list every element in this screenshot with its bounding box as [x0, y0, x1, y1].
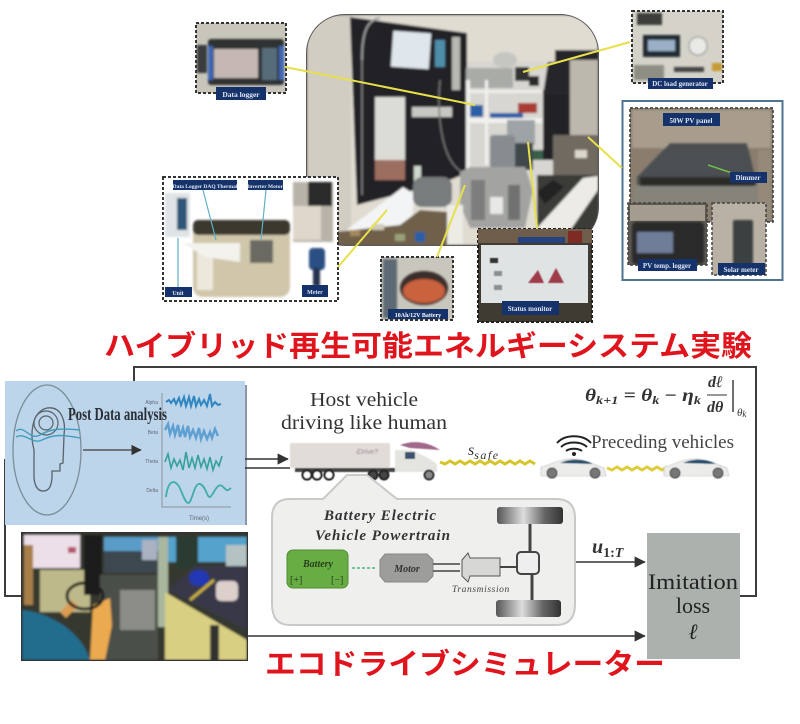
- panel: wind turbine inset: [163, 177, 338, 301]
- icon: transmission and axle: [433, 507, 563, 617]
- label: solar meter: Solar meter: [723, 266, 759, 274]
- arrow: simulator to imitation loss: [247, 635, 645, 637]
- feedback loop line: [134, 367, 756, 596]
- spring: truck to car: [440, 461, 535, 464]
- formula: parameter update: k: [742, 409, 747, 419]
- PV temperature logger photo: [628, 203, 707, 265]
- chart: signal waveforms: Time(s): [189, 516, 209, 522]
- label: post data analysis: Post Data analysis: [68, 404, 167, 424]
- panel: imitation loss: Imitation: [648, 569, 738, 594]
- icon: head with brain waves: [13, 385, 81, 515]
- label: inverter: [247, 180, 283, 190]
- PV panel photo: [630, 108, 773, 222]
- formula: parameter update: θ: [641, 385, 651, 405]
- label: dimmer: [730, 172, 767, 183]
- label: meter: Meter: [307, 290, 323, 296]
- formula: parameter update: dθ: [707, 399, 724, 416]
- panel: post data analysis: [5, 381, 247, 525]
- chart: signal waveforms: [145, 393, 231, 522]
- label: status monitor: Status monitor: [508, 305, 552, 313]
- icon: battery: [−]: [331, 575, 343, 586]
- line from simulator to analysis: [5, 459, 25, 596]
- label: safe distance: s: [468, 442, 474, 459]
- label: preceding vehicles: Preceding vehicles: [591, 432, 734, 453]
- panel: PV setup group: [622, 101, 782, 280]
- icon: battery: [287, 550, 348, 588]
- chart: signal waveforms: Delta: [146, 488, 158, 494]
- label: data logger: Data logger: [222, 90, 260, 99]
- arrow: control output: [576, 561, 645, 563]
- formula: parameter update: =: [618, 385, 641, 405]
- label: wind turbine sensor: [173, 180, 238, 190]
- label: inverter: Inverter Motor: [247, 184, 283, 190]
- label: PV temp logger: PV temp. logger: [643, 262, 691, 270]
- label: dimmer: Dimmer: [736, 174, 760, 182]
- label: control sequence: u: [592, 536, 603, 558]
- formula: parameter update: k+1: [596, 393, 618, 407]
- panel: data logger inset: [196, 23, 286, 100]
- label: powertrain title: Vehicle Powertrain: [315, 528, 451, 544]
- title: eco-drive simulator: エコドライブシミュレーター: [265, 647, 665, 681]
- arrow: head to signals: [83, 449, 141, 451]
- label: unit: [165, 287, 192, 297]
- label: host vehicle: Host vehicle: [310, 389, 418, 411]
- chart: signal waveforms: Beta: [148, 430, 158, 436]
- icon: wifi signal: [557, 436, 591, 455]
- yellow connector lines: [285, 42, 630, 267]
- formula: parameter update: −: [659, 385, 682, 405]
- icon: preceding car 1: [541, 459, 606, 478]
- label: wind turbine sensor: Data Logger DAQ Thermal: [173, 184, 238, 190]
- panel: main laboratory photo: [306, 14, 599, 246]
- label: unit: Unit: [172, 291, 184, 297]
- formula: parameter update: [585, 374, 747, 419]
- panel: imitation loss: loss: [676, 593, 710, 618]
- spring: car to car: [607, 467, 667, 470]
- formula: parameter update: θ: [737, 407, 742, 419]
- formula: parameter update: θ: [585, 385, 594, 405]
- icon: motor: Motor: [393, 564, 420, 575]
- panel: battery inset: [381, 257, 453, 320]
- solar meter photo: [712, 203, 766, 275]
- label: PV temp logger: [638, 259, 697, 271]
- label: PV panel: 50W PV panel: [670, 117, 713, 125]
- formula: parameter update: k: [652, 393, 659, 407]
- label: meter: [302, 285, 328, 297]
- icon: host truck: [290, 442, 440, 480]
- icon: battery: Battery: [302, 559, 334, 570]
- label: solar meter: [718, 263, 765, 275]
- icon: motor: [380, 554, 433, 582]
- connector: battery to motor: [352, 567, 376, 569]
- label: PV panel: [663, 113, 720, 126]
- formula: parameter update: η: [682, 385, 692, 405]
- panel: DC load generator inset: [632, 11, 723, 89]
- panel: imitation loss: [647, 533, 740, 659]
- label: powertrain title: Battery Electric: [323, 508, 437, 524]
- label: control sequence: T: [615, 546, 625, 561]
- chart: signal waveforms: Theta: [145, 459, 158, 465]
- double arrow: analysis to host vehicle: [245, 459, 290, 468]
- icon: preceding car 2: [664, 459, 729, 478]
- label: host vehicle: driving like human: [281, 412, 447, 434]
- label: host vehicle: [281, 389, 447, 434]
- icon: host truck: iDrive?: [356, 449, 378, 456]
- icon: battery: [+]: [290, 575, 302, 586]
- label: safe distance: safe: [474, 448, 500, 462]
- label: DC load generator: DC load generator: [652, 80, 708, 88]
- label: battery: 10Ah/12V Battery: [395, 313, 441, 319]
- label: control sequence: 1:: [603, 546, 615, 561]
- formula: parameter update: k: [694, 393, 701, 407]
- formula: parameter update: dℓ: [708, 374, 723, 391]
- panel: status monitor inset: [478, 229, 592, 322]
- panel: battery electric vehicle powertrain: [272, 475, 575, 625]
- title: hybrid renewable energy experiment: ハイブリッド再生可能エネルギーシステム実験: [104, 329, 752, 363]
- panel: driving simulator photo: [22, 533, 247, 660]
- label: transmission: Transmission: [452, 585, 510, 595]
- chart: signal waveforms: Alpha: [145, 400, 158, 406]
- panel: imitation loss: ℓ: [688, 619, 698, 644]
